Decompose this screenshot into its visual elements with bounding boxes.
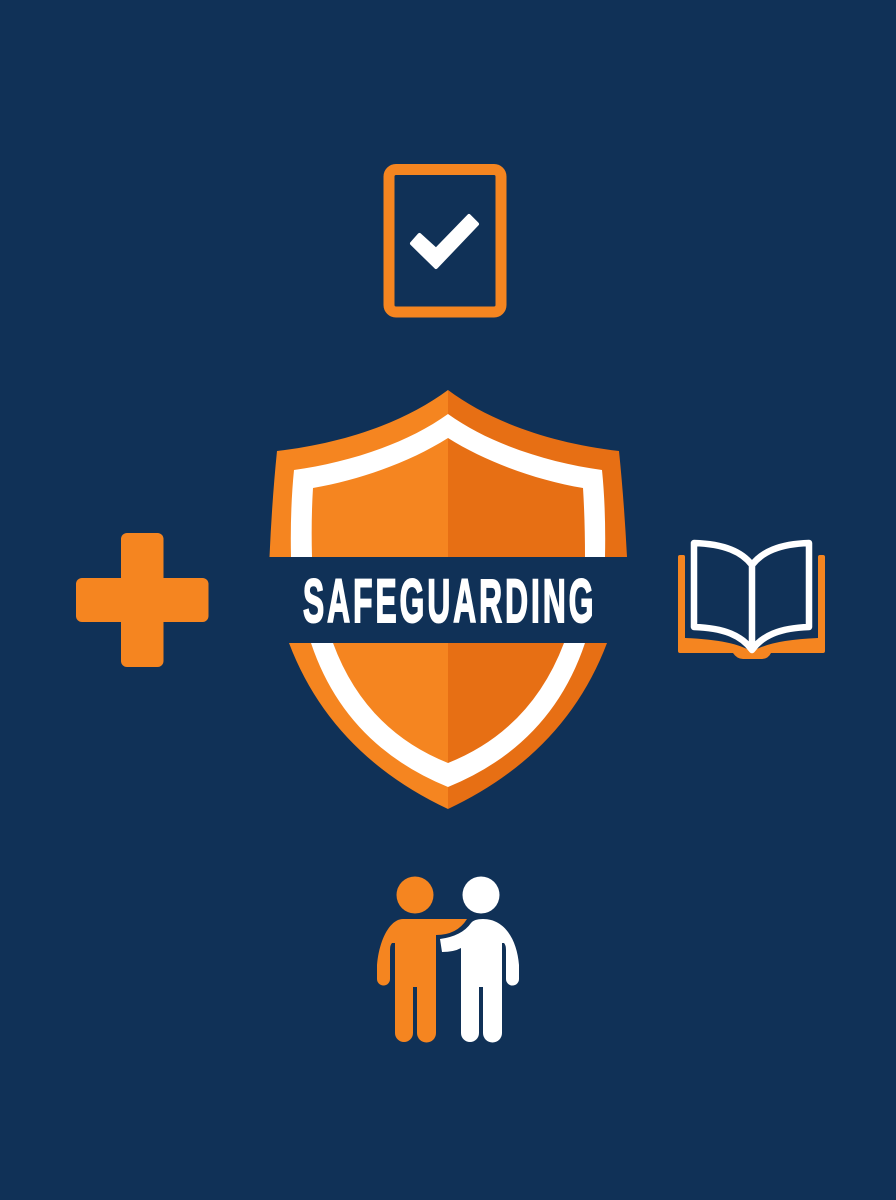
icon: two people, supportive arm	[377, 876, 519, 1042]
banner title: SAFEGUARDING	[303, 568, 596, 636]
person: orange	[377, 876, 467, 1042]
shield inner face	[312, 438, 585, 763]
banner band	[260, 557, 636, 643]
shield white ring	[291, 414, 605, 787]
icon: open book	[678, 543, 825, 659]
shield outer rim	[270, 390, 627, 809]
shield with safeguarding banner	[260, 390, 636, 809]
icon: checklist document with tick	[389, 170, 501, 312]
person: white	[440, 876, 519, 1042]
icon: medical plus	[76, 533, 208, 667]
